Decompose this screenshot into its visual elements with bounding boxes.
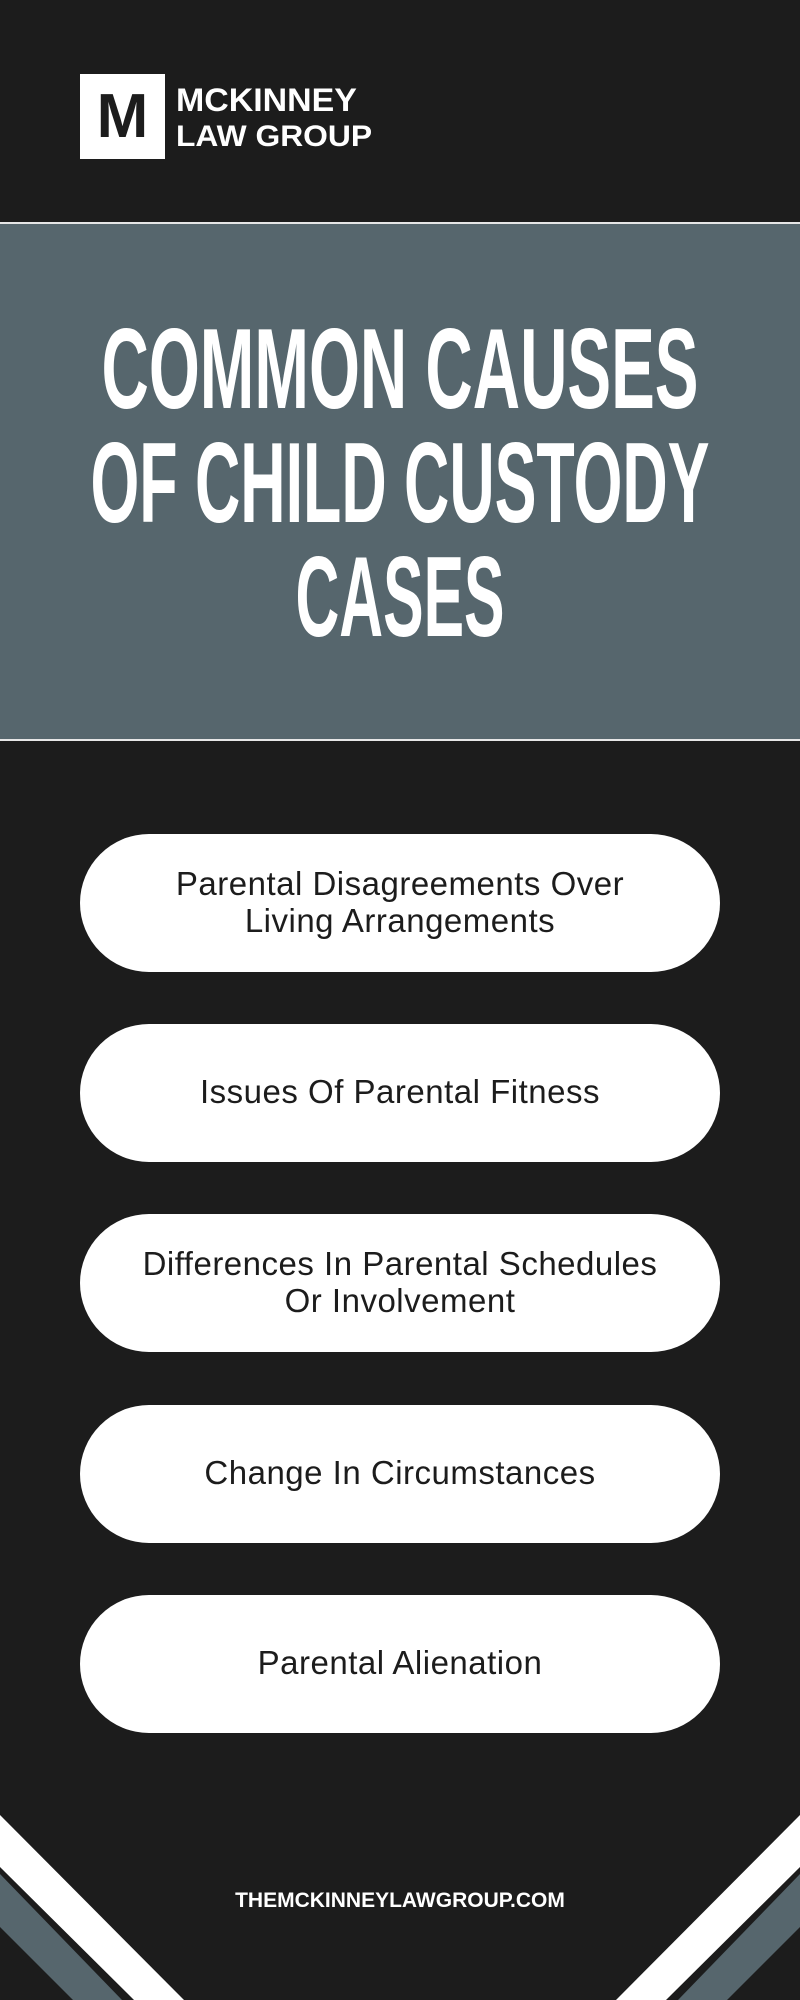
icon: logo square: M	[97, 82, 148, 151]
icon: logo square	[80, 74, 165, 159]
cause 1: Living Arrangements	[245, 902, 555, 938]
cause 3	[80, 1214, 720, 1352]
cause 4	[80, 1405, 720, 1543]
cause 1	[80, 834, 720, 972]
cause 4: Change In Circumstances	[204, 1454, 596, 1491]
cause 5: Parental Alienation	[258, 1644, 542, 1681]
logo	[80, 74, 372, 159]
cause 2: Issues Of Parental Fitness	[200, 1073, 600, 1110]
logo text: MCKINNEY	[176, 82, 357, 118]
cause 3: Or Involvement	[285, 1282, 515, 1318]
logo text: LAW GROUP	[176, 120, 372, 153]
title	[90, 306, 710, 661]
title: CASES	[296, 534, 504, 661]
cause 5	[80, 1595, 720, 1733]
decorative corner stripes	[0, 1815, 800, 2000]
cause 3: Differences In Parental Schedules	[143, 1244, 657, 1282]
title panel	[0, 222, 800, 741]
cause 2	[80, 1024, 720, 1162]
footer url: THEMCKINNEYLAWGROUP.COM	[235, 1889, 565, 1912]
logo text	[176, 82, 372, 153]
cause 1: Parental Disagreements Over	[176, 864, 624, 902]
